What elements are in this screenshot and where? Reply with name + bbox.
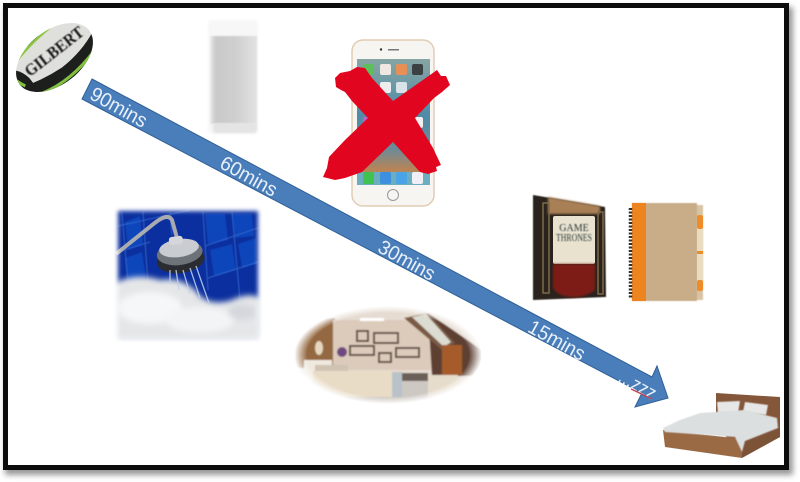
icon: shower [110,204,265,344]
icon: crossed-out phone [323,40,450,206]
label: 60mins: 60mins [216,152,281,202]
steam cloud [112,277,262,342]
mattress and duvet [663,410,778,452]
icon: glass of milk [208,20,258,134]
icon: notebook with pen [630,203,703,301]
icon: bed [663,393,780,458]
icon: bedroom oval photo [295,308,482,403]
icon: Game of Thrones book [533,195,606,300]
wall tiles [125,214,256,282]
timeline arrow [82,79,668,407]
lamp [315,341,323,355]
phone body [352,40,434,206]
icon: Game of Thrones book: THRONES [556,233,592,244]
spell-check underline [631,389,652,399]
ball brand text: GILBERT [21,22,88,80]
plant [337,347,347,357]
shower pipe [116,217,177,254]
bed [303,358,333,376]
bed frame [663,430,742,458]
red cross [323,67,450,180]
water streams [170,266,209,303]
shower head [156,236,204,274]
headboard [716,393,780,455]
label: zzz: ...zzz [615,367,660,404]
label: 90mins: 90mins [86,83,151,133]
wall frames [350,331,419,362]
label: 30mins: 30mins [374,236,439,286]
pillows [717,401,768,415]
book cover text: GAME [559,223,589,234]
label: 15mins: 15mins [524,316,589,366]
icon: rugby ball [16,23,93,92]
